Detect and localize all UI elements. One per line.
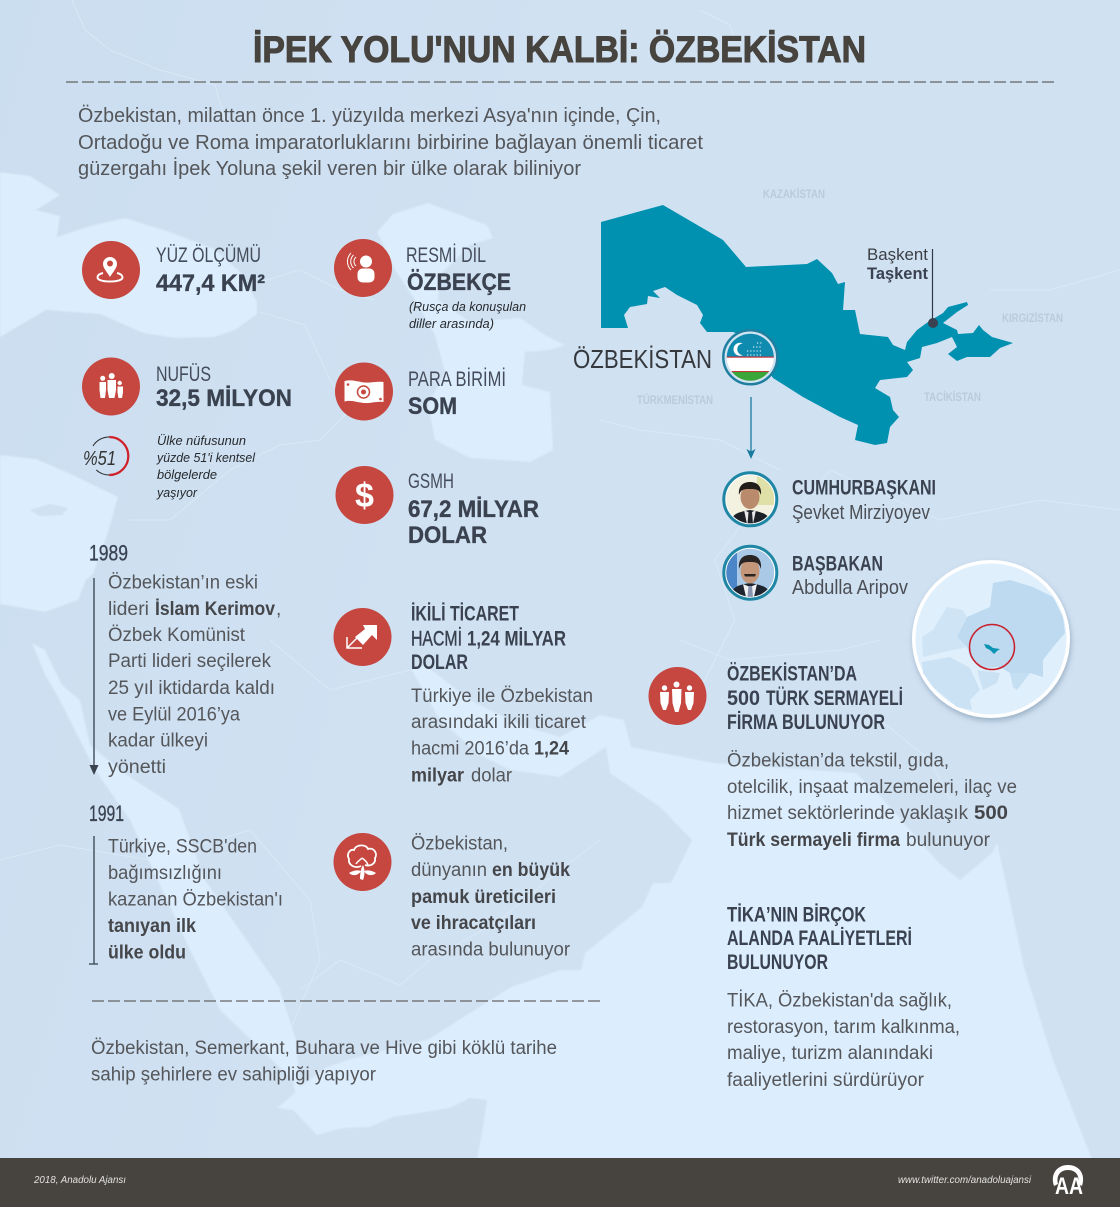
icon: dollar bbox=[336, 466, 394, 524]
neighbour labels: KAZAKİSTAN bbox=[763, 186, 825, 201]
panel: 500 Türk firması: FİRMA BULUNUYOR bbox=[727, 711, 885, 734]
panel: pamuk: pamuk üreticileri bbox=[411, 887, 556, 908]
timeline entry: 1991: Türkiye, SSCB'den bbox=[108, 837, 257, 858]
icon: business people bbox=[648, 667, 706, 725]
stat: para birimi bbox=[335, 362, 506, 420]
intro text: Özbekistan, milattan önce 1. yüzyılda merkezi Asya'nın içinde, Çin, bbox=[78, 105, 661, 127]
portrait: Aripov bbox=[724, 546, 777, 599]
leader: Cumhurbaşkanı: CUMHURBAŞKANI bbox=[792, 476, 936, 499]
intro text: Ortadoğu ve Roma imparatorluklarını birbirine bağlayan önemli ticaret bbox=[78, 132, 703, 154]
leader: Cumhurbaşkanı bbox=[724, 473, 936, 526]
icon: trade arrows bbox=[334, 608, 392, 666]
panel: ikili ticaret: hacmi 2016’da bbox=[411, 739, 529, 760]
stat: gsmh: GSMH bbox=[408, 470, 454, 493]
stat: yüz ölçümü: YÜZ ÖLÇÜMÜ bbox=[156, 244, 261, 267]
panel: ikili ticaret: DOLAR bbox=[411, 651, 468, 674]
timeline entry: 1991: ülke oldu bbox=[108, 942, 186, 964]
timeline entry: 1989: , bbox=[276, 599, 281, 620]
panel: 500 Türk firması: otelcilik, inşaat malzemeleri, ilaç ve bbox=[727, 777, 1017, 798]
neighbour labels: KIRGIZİSTAN bbox=[1002, 310, 1063, 325]
bottom note: sahip şehirlere ev sahipliği yapıyor bbox=[91, 1064, 377, 1086]
timeline entry: 1991: tanıyan ilk bbox=[108, 916, 196, 937]
stat: nüfus: NUFÜS bbox=[156, 363, 211, 386]
icon: family bbox=[82, 358, 140, 416]
panel: ikili ticaret: 1,24 bbox=[534, 739, 569, 760]
panel: 500 Türk firması: Türk sermayeli firma bbox=[727, 830, 900, 851]
arrow: flag to leaders bbox=[746, 397, 756, 459]
panel: pamuk: dünyanın bbox=[411, 860, 487, 881]
stat: resmi dil bbox=[334, 239, 526, 331]
stat: para birimi: PARA BİRİMİ bbox=[408, 368, 506, 391]
panel: ikili ticaret bbox=[334, 603, 593, 787]
panel: TİKA: faaliyetlerini sürdürüyor bbox=[727, 1070, 925, 1091]
stat: gsmh: 67,2 MİLYAR bbox=[408, 496, 539, 523]
timeline entry: 1989: 25 yıl iktidarda kaldı bbox=[108, 678, 275, 699]
timeline entry: 1989: ve Eylül 2016’ya bbox=[108, 705, 240, 726]
leader: Başbakan: Abdulla Aripov bbox=[792, 577, 908, 599]
timeline entry: 1991: bağımsızlığını bbox=[108, 863, 222, 884]
stat: kentsel nüfus %51: %51 bbox=[83, 448, 116, 470]
leader: Başbakan: BAŞBAKAN bbox=[792, 553, 883, 576]
locator globe bbox=[912, 560, 1070, 718]
footer bbox=[0, 1158, 1120, 1207]
panel: pamuk: arasında bulunuyor bbox=[411, 940, 571, 960]
panel: 500 Türk firması: ÖZBEKİSTAN’DA bbox=[727, 663, 857, 686]
flag of Uzbekistan bbox=[723, 330, 777, 384]
icon: speaker bbox=[334, 239, 392, 297]
intro text: güzergahı İpek Yoluna şekil veren bir ülke olarak biliniyor bbox=[78, 157, 581, 180]
panel: TİKA: BULUNUYOR bbox=[727, 951, 828, 974]
leader: Cumhurbaşkanı: Şevket Mirziyoyev bbox=[792, 502, 930, 524]
panel: TİKA: maliye, turizm alanındaki bbox=[727, 1043, 933, 1064]
stat: resmi dil: diller arasında) bbox=[409, 316, 494, 331]
label: Özbekistan: ÖZBEKİSTAN bbox=[573, 344, 712, 374]
footer: 2018, Anadolu Ajansı bbox=[33, 1175, 126, 1186]
capital callout bbox=[867, 245, 938, 328]
timeline entry: 1989: kadar ülkeyi bbox=[108, 730, 208, 752]
stat: yüz ölçümü: 447,4 KM² bbox=[156, 270, 265, 297]
timeline entry: 1991: 1991 bbox=[89, 801, 124, 826]
timeline entry: 1989: Özbekistan’ın eski bbox=[108, 573, 258, 594]
panel: 500 Türk firması: hizmet sektörlerinde yaklaşık bbox=[727, 803, 968, 824]
panel: 500 Türk firması: 500 bbox=[727, 687, 760, 710]
icon: banknote bbox=[335, 362, 393, 420]
panel: ikili ticaret: Türkiye ile Özbekistan bbox=[411, 686, 593, 707]
panel: TİKA: ’NIN BİRÇOK bbox=[766, 904, 866, 927]
stat: kentsel nüfus %51: yüzde 51'i kentsel bbox=[156, 450, 256, 465]
icon: dollar: $ bbox=[355, 477, 374, 515]
footer: www.twitter.com/anadoluajansi bbox=[898, 1175, 1032, 1186]
stat: nüfus: 32,5 MİLYON bbox=[156, 385, 292, 412]
donut chart bbox=[93, 437, 128, 475]
portrait: Mirziyoyev bbox=[724, 473, 777, 526]
icon: location pin bbox=[82, 241, 140, 299]
timeline entry: 1989: Özbek Komünist bbox=[108, 625, 246, 646]
stat: nüfus bbox=[82, 358, 292, 416]
neighbour labels: TÜRKMENİSTAN bbox=[637, 392, 713, 407]
timeline bbox=[89, 541, 283, 964]
panel: TİKA: TİKA bbox=[727, 904, 766, 927]
title: İPEK YOLU'NUN KALBİ: ÖZBEKİSTAN bbox=[253, 29, 866, 70]
panel: pamuk: ve ihracatçıları bbox=[411, 913, 536, 934]
panel: TİKA: TİKA, Özbekistan'da sağlık, bbox=[727, 991, 952, 1012]
panel: ikili ticaret: dolar bbox=[471, 766, 513, 787]
capital callout: Taşkent bbox=[867, 264, 928, 283]
panel: 500 Türk firması: bulunuyor bbox=[906, 830, 991, 851]
timeline entry: 1991 bbox=[89, 801, 283, 964]
panel: ikili ticaret: HACMİ bbox=[411, 628, 462, 650]
panel: TİKA bbox=[727, 904, 960, 1091]
panel: 500 Türk firması: TÜRK SERMAYELİ bbox=[766, 687, 903, 710]
icon: cotton bbox=[334, 833, 392, 891]
neighbour labels: TACİKİSTAN bbox=[924, 389, 981, 404]
timeline entry: 1989: lideri bbox=[108, 599, 149, 620]
panel: TİKA: restorasyon, tarım kalkınma, bbox=[727, 1017, 960, 1038]
panel: 500 Türk firması: 500 bbox=[974, 803, 1008, 824]
stat: resmi dil: RESMİ DİL bbox=[406, 244, 486, 267]
panel: pamuk: Özbekistan, bbox=[411, 833, 508, 854]
timeline entry: 1989 bbox=[89, 541, 281, 778]
stat: kentsel nüfus %51: bölgelerde bbox=[157, 467, 217, 482]
capital callout: Başkent bbox=[867, 245, 928, 264]
panel: 500 Türk firması bbox=[648, 663, 1017, 851]
panel: ikili ticaret: arasındaki ikili ticaret bbox=[411, 712, 587, 733]
timeline entry: 1991: kazanan Özbekistan'ı bbox=[108, 890, 283, 911]
bottom note: Özbekistan, Semerkant, Buhara ve Hive gibi köklü tarihe bbox=[91, 1038, 557, 1059]
panel: pamuk bbox=[334, 833, 571, 960]
panel: pamuk: en büyük bbox=[492, 860, 570, 881]
panel: 500 Türk firması: Özbekistan’da tekstil, gıda, bbox=[727, 751, 949, 772]
intro text bbox=[78, 105, 703, 180]
stat: kentsel nüfus %51: Ülke nüfusunun bbox=[157, 433, 246, 448]
panel: ikili ticaret: 1,24 MİLYAR bbox=[467, 628, 566, 650]
bottom note bbox=[91, 1038, 557, 1086]
logo: Anadolu Ajansı bbox=[1053, 1165, 1083, 1200]
panel: TİKA: ALANDA FAALİYETLERİ bbox=[727, 927, 912, 950]
logo: Anadolu Ajansı: AA bbox=[1055, 1173, 1083, 1200]
stat: para birimi: SOM bbox=[408, 393, 457, 420]
stat: kentsel nüfus %51: yaşıyor bbox=[156, 485, 198, 500]
timeline entry: 1989: yönetti bbox=[108, 757, 166, 778]
stat: resmi dil: ÖZBEKÇE bbox=[407, 269, 511, 296]
stat: yüz ölçümü bbox=[82, 241, 265, 299]
timeline entry: 1989: İslam Kerimov bbox=[155, 599, 275, 620]
panel: ikili ticaret: milyar bbox=[411, 766, 465, 787]
panel: ikili ticaret: İKİLİ TİCARET bbox=[411, 603, 519, 626]
map: Özbekistan bbox=[573, 186, 1063, 459]
timeline entry: 1989: 1989 bbox=[89, 541, 128, 566]
timeline entry: 1989: Parti lideri seçilerek bbox=[108, 651, 271, 672]
stat: resmi dil: (Rusça da konuşulan bbox=[409, 299, 526, 314]
neighbour labels bbox=[637, 186, 1063, 407]
stat: gsmh: DOLAR bbox=[408, 522, 487, 549]
stat: kentsel nüfus %51 bbox=[83, 433, 256, 500]
stat: gsmh bbox=[336, 466, 539, 549]
leader: Başbakan bbox=[724, 546, 908, 599]
